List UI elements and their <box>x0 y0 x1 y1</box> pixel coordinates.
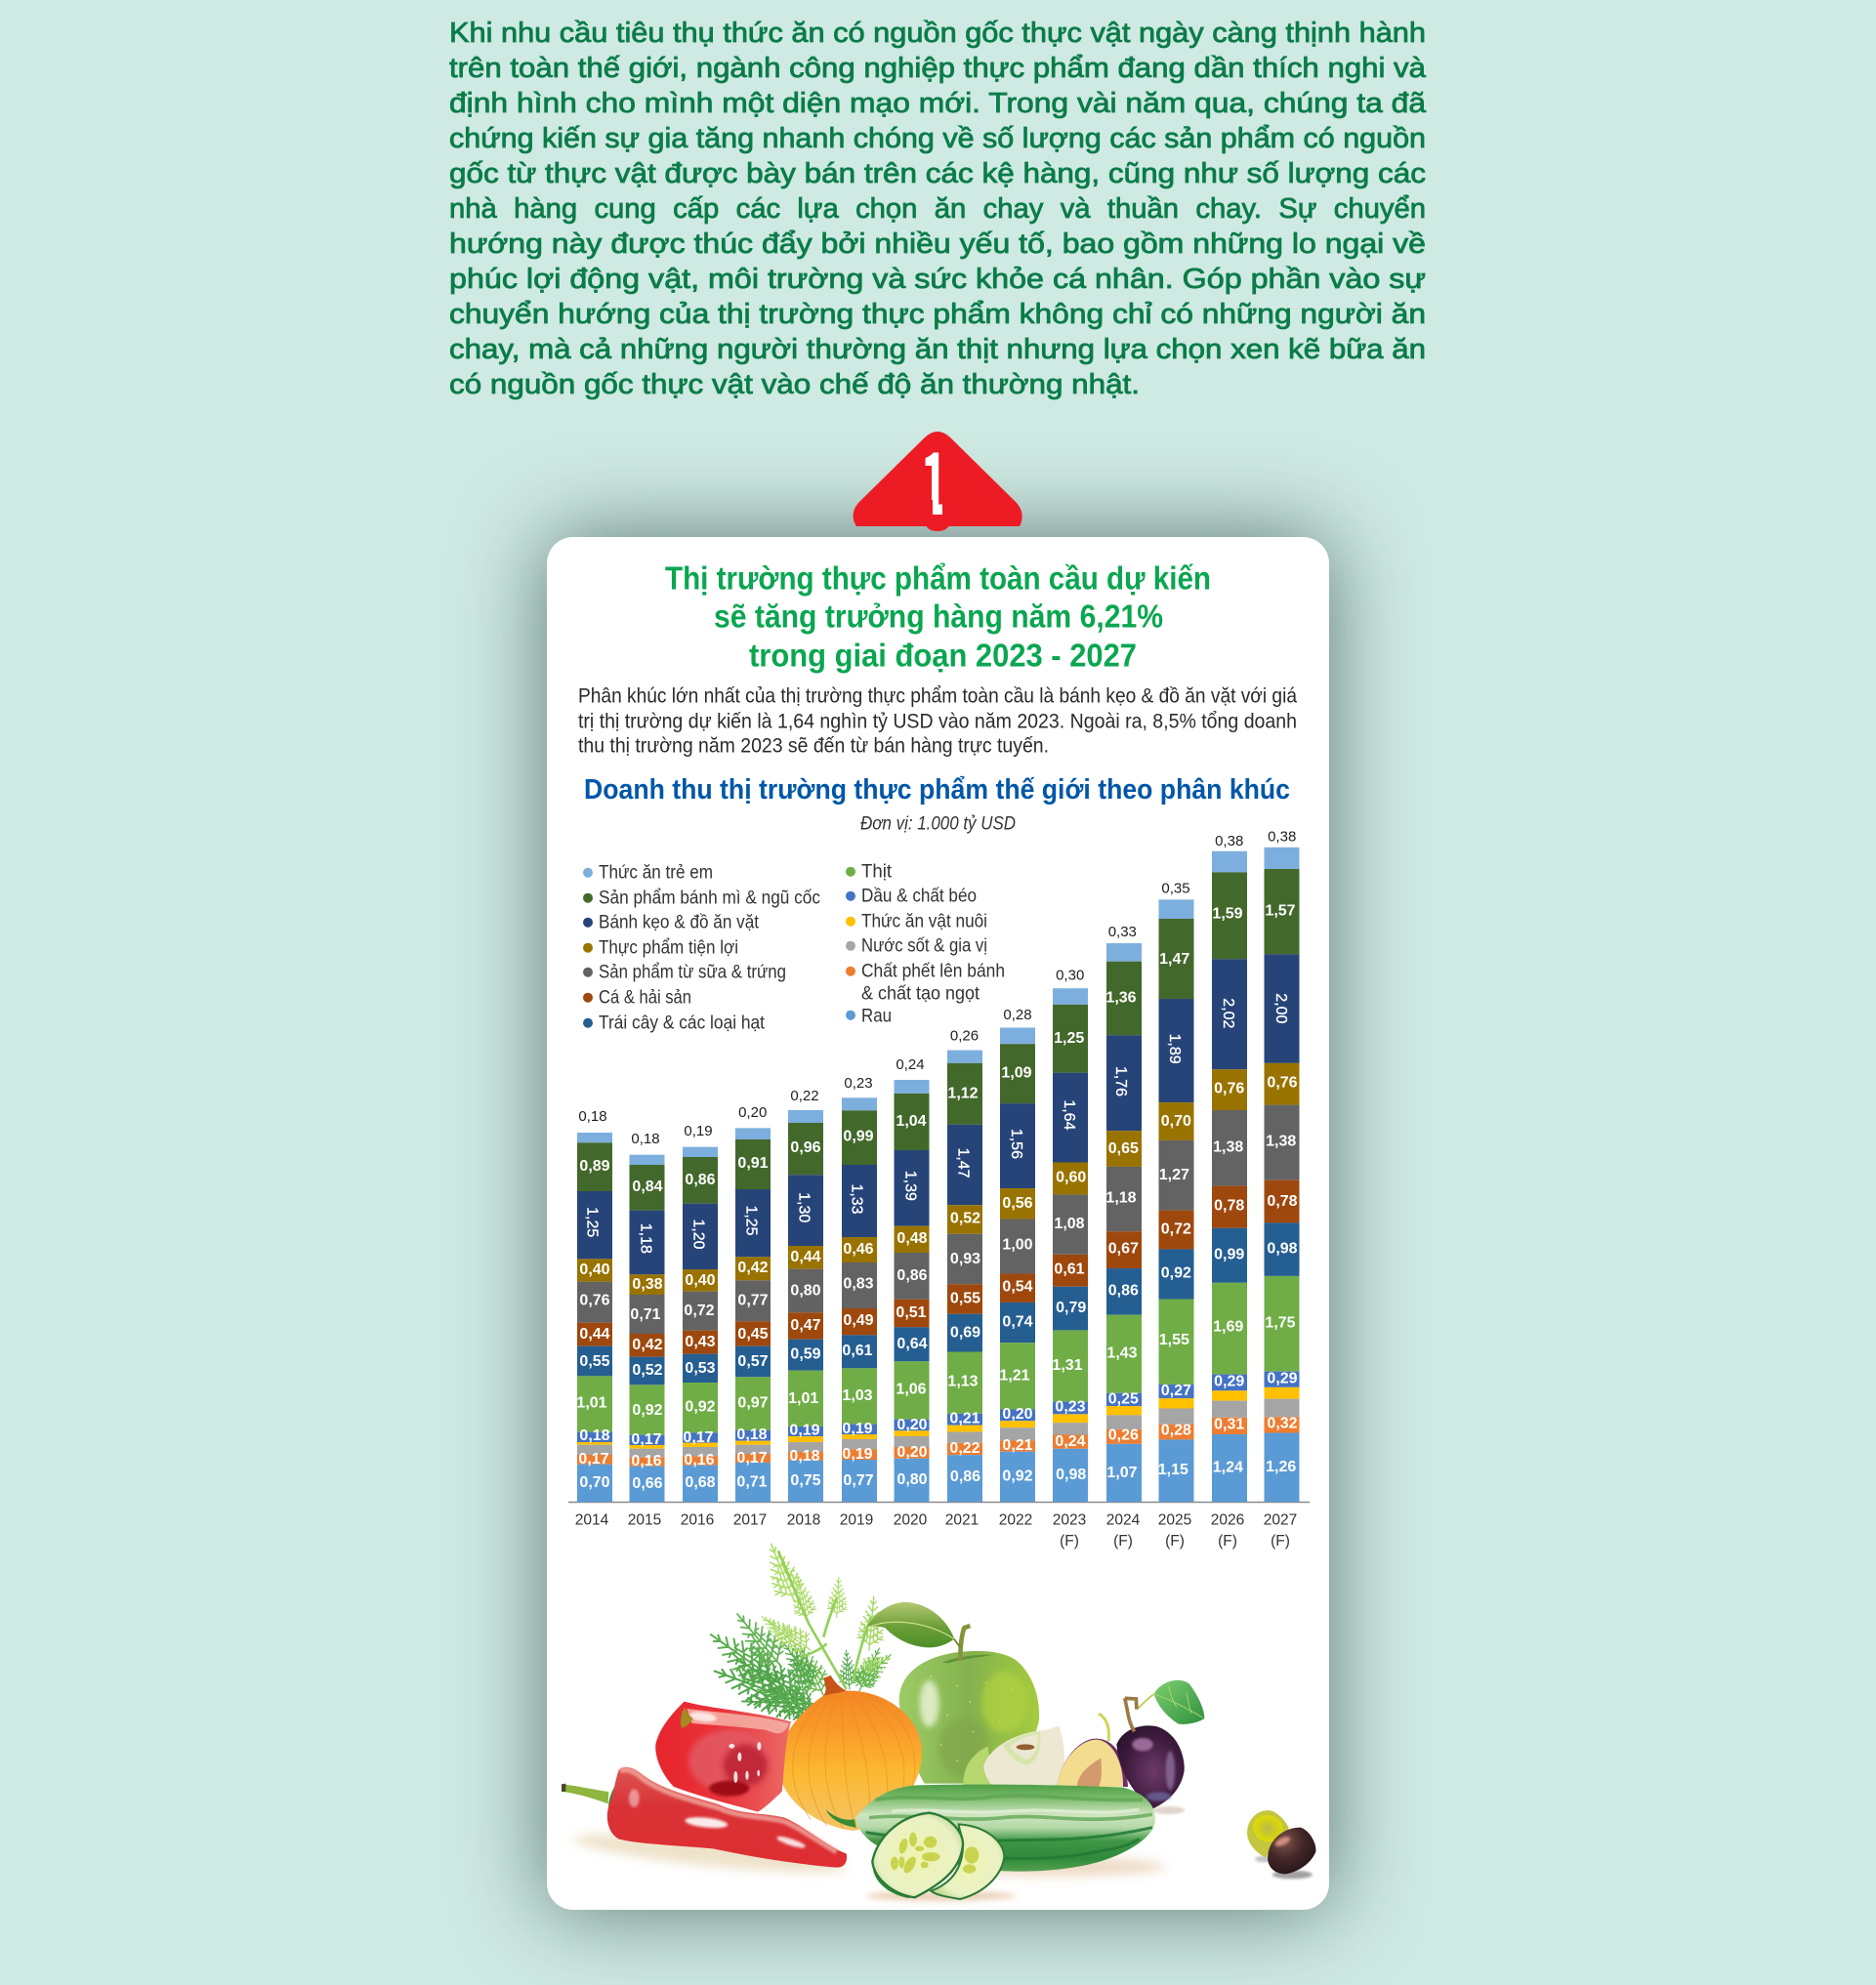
panel: white chart card <box>547 537 1329 1910</box>
legend: right column: Dầu & chất béo <box>861 886 977 907</box>
bar 2024 forecast: 0,65 <box>1108 1140 1139 1157</box>
year axis labels: (F) <box>1218 1533 1237 1550</box>
bar 2025 forecast: 1,27 <box>1159 1167 1189 1183</box>
bar 2016: 0,19 <box>684 1123 713 1139</box>
bar 2018: 0,59 <box>790 1345 821 1363</box>
bar 2026 forecast: 0,29 <box>1214 1373 1244 1390</box>
card heading: Thị trường thực phẩm toàn cầu dự kiến <box>665 560 1211 596</box>
intro paragraph <box>449 18 1426 400</box>
icon: red chili pepper <box>562 1767 847 1881</box>
year axis labels: 2020 <box>894 1511 928 1529</box>
bar 2018: 0,19 <box>789 1422 820 1439</box>
bar 2022: 0,92 <box>1002 1468 1033 1485</box>
bar 2022: 1,56 <box>1008 1129 1024 1159</box>
card heading: trong giai đoạn 2023 - 2027 <box>749 637 1137 674</box>
legend: left column: Sản phẩm bánh mì & ngũ cốc <box>599 888 820 909</box>
legend: left column: Thực phẩm tiện lợi <box>599 937 738 959</box>
bar 2014 <box>576 1108 612 1502</box>
card heading <box>665 560 1211 674</box>
bar 2018: 0,22 <box>790 1088 819 1104</box>
bar 2020: 0,24 <box>896 1056 925 1073</box>
bar 2023 forecast: 1,08 <box>1054 1216 1085 1232</box>
year axis labels: 2024 <box>1106 1511 1141 1529</box>
bar 2019: 1,33 <box>848 1183 865 1215</box>
bar 2022: 0,54 <box>1002 1279 1033 1296</box>
bar 2025 forecast: 0,28 <box>1161 1423 1191 1439</box>
icon: tomato <box>655 1702 791 1812</box>
card heading: sẽ tăng trưởng hàng năm 6,21% <box>714 598 1163 635</box>
icon: cucumber slices <box>872 1813 1004 1899</box>
bar 2022: 0,56 <box>1002 1195 1033 1212</box>
icon: plum with leaf <box>1116 1680 1204 1814</box>
bar 2021: 0,93 <box>950 1251 980 1267</box>
legend: left column: Bánh kẹo & đồ ăn vặt <box>599 912 760 933</box>
icon: apple leaf and stem <box>866 1602 970 1661</box>
bar 2026 forecast: 0,31 <box>1214 1417 1244 1433</box>
bar 2027 forecast: 0,76 <box>1267 1074 1298 1092</box>
bar 2014: 0,44 <box>579 1326 610 1343</box>
bar 2021: 0,52 <box>950 1211 980 1226</box>
bar 2014: 0,76 <box>579 1293 610 1308</box>
bar 2014: 1,01 <box>576 1394 607 1412</box>
icon: apple slice <box>963 1725 1064 1787</box>
bar 2017: 0,18 <box>736 1427 768 1443</box>
legend: left column <box>583 862 820 1034</box>
bar 2023 forecast: 0,60 <box>1056 1170 1086 1186</box>
intro paragraph: phúc lợi động vật, môi trường và sức khỏe cá nhân. Góp phần vào sự <box>449 264 1426 295</box>
bar 2015: 0,42 <box>632 1337 663 1353</box>
legend: right column: Thức ăn vật nuôi <box>861 911 987 932</box>
bar 2015: 0,52 <box>632 1362 663 1379</box>
year axis labels: 2017 <box>733 1511 767 1529</box>
bar 2015 <box>629 1131 664 1502</box>
bar 2016: 0,43 <box>685 1334 716 1350</box>
bar 2024 forecast: 1,36 <box>1105 990 1137 1007</box>
intro paragraph: nhà hàng cung cấp các lựa chọn ăn chay và thuần chay. Sự chuyển <box>449 193 1426 225</box>
bar 2017: 0,17 <box>736 1450 768 1467</box>
bar 2020: 0,20 <box>896 1444 928 1461</box>
bar 2014: 0,18 <box>579 1427 610 1444</box>
bar 2019: 0,19 <box>842 1421 873 1437</box>
bar 2021: 1,12 <box>947 1085 979 1101</box>
bar 2021: 1,47 <box>955 1147 971 1179</box>
bar 2027 forecast: 1,75 <box>1265 1314 1296 1332</box>
year axis labels: 2027 <box>1264 1511 1297 1529</box>
year axis labels: (F) <box>1165 1533 1185 1550</box>
legend: left column: Thức ăn trẻ em <box>599 862 713 884</box>
bar 2026 forecast: 0,76 <box>1214 1080 1244 1096</box>
bar 2018: 0,96 <box>790 1139 821 1156</box>
icon: plum half <box>1057 1714 1128 1787</box>
bar 2027 forecast: 0,29 <box>1267 1371 1298 1386</box>
bar 2015: 0,92 <box>632 1402 663 1419</box>
bar 2016: 0,40 <box>685 1272 716 1289</box>
icon: dill herb <box>700 1539 898 1726</box>
bar 2023 forecast: 0,24 <box>1055 1433 1086 1450</box>
bar 2014: 0,40 <box>579 1261 610 1278</box>
bar 2019: 0,99 <box>843 1129 874 1144</box>
bar 2024 forecast <box>1105 924 1142 1502</box>
bar 2025 forecast: 0,27 <box>1161 1383 1191 1399</box>
bar 2017: 0,91 <box>737 1155 769 1172</box>
bar 2025 forecast: 0,70 <box>1161 1113 1191 1130</box>
bar 2021: 0,86 <box>950 1468 980 1485</box>
bar 2015: 0,16 <box>631 1453 662 1469</box>
bar 2018: 0,44 <box>790 1249 821 1265</box>
bar 2019: 1,03 <box>842 1387 873 1404</box>
bar 2017: 1,25 <box>742 1205 760 1236</box>
bar 2023 forecast: 0,98 <box>1056 1467 1086 1483</box>
bar 2027 forecast: 1,38 <box>1266 1133 1296 1149</box>
bar 2017: 0,42 <box>737 1260 769 1276</box>
bar 2019: 0,61 <box>842 1343 873 1359</box>
bar 2027 forecast: 0,32 <box>1267 1416 1298 1432</box>
bar 2026 forecast: 1,59 <box>1212 906 1243 923</box>
bar 2018: 0,80 <box>790 1283 821 1299</box>
bar 2017: 0,20 <box>738 1104 767 1121</box>
intro paragraph: gốc từ thực vật được bày bán trên các kệ hàng, cũng như số lượng các <box>449 158 1426 189</box>
bar 2022: 0,28 <box>1003 1007 1032 1023</box>
bar 2015: 0,18 <box>631 1131 660 1147</box>
bar 2016: 0,92 <box>685 1398 716 1416</box>
bar 2024 forecast: 0,86 <box>1108 1283 1139 1300</box>
description text: Phân khúc lớn nhất của thị trường thực phẩm toàn cầu là bánh kẹo & đồ ăn vặt với giá <box>578 684 1297 708</box>
bar 2021: 0,26 <box>950 1027 979 1044</box>
legend: right column: Thịt <box>861 861 893 883</box>
bar 2021: 0,21 <box>949 1410 980 1427</box>
year axis labels: (F) <box>1271 1533 1290 1550</box>
chart unit: Đơn vị: 1.000 tỷ USD <box>860 814 1016 834</box>
bar 2015: 0,84 <box>632 1179 663 1195</box>
bar 2020: 0,64 <box>896 1336 928 1352</box>
intro paragraph: hướng này được thúc đẩy bởi nhiều yếu tố, bao gồm những lo ngại về <box>449 228 1426 260</box>
bar 2017: 0,77 <box>737 1293 769 1308</box>
legend: right column <box>846 861 1005 1027</box>
bar 2014: 0,17 <box>578 1451 609 1468</box>
bar 2019: 0,23 <box>844 1075 873 1092</box>
year axis labels: 2021 <box>945 1511 979 1529</box>
bar 2017 <box>735 1104 771 1502</box>
bar 2017: 0,57 <box>737 1353 769 1370</box>
bar 2019: 0,49 <box>843 1312 874 1329</box>
bar 2017: 0,45 <box>737 1326 769 1343</box>
bar 2018 <box>788 1088 823 1502</box>
bar 2027 forecast: 1,57 <box>1265 903 1296 920</box>
bar 2023 forecast: 1,64 <box>1061 1099 1077 1131</box>
illustration: fruit and vegetables <box>562 1539 1315 1901</box>
icon: onion <box>778 1675 922 1831</box>
bar 2026 forecast: 0,38 <box>1215 833 1243 849</box>
bar 2016: 0,86 <box>685 1172 716 1188</box>
legend: left column: Trái cây & các loại hạt <box>599 1013 766 1034</box>
bar 2027 forecast <box>1264 828 1299 1502</box>
bar 2022: 0,74 <box>1002 1314 1033 1330</box>
bar 2025 forecast: 0,35 <box>1161 881 1190 897</box>
bar 2023 forecast: 0,30 <box>1056 967 1084 984</box>
bar 2023 forecast: 1,31 <box>1052 1357 1083 1374</box>
bar 2020: 0,51 <box>896 1304 927 1321</box>
bar 2018: 0,18 <box>789 1448 820 1465</box>
bar 2026 forecast: 1,38 <box>1213 1138 1243 1155</box>
year axis labels: 2014 <box>575 1511 609 1529</box>
badge: red triangle with number 1 <box>854 417 1022 540</box>
bar 2025 forecast: 0,92 <box>1161 1265 1191 1281</box>
bar 2024 forecast: 1,18 <box>1105 1189 1137 1206</box>
icon: apple <box>899 1651 1039 1784</box>
legend: right column: Nước sốt & gia vị <box>861 935 987 957</box>
bar 2024 forecast: 1,07 <box>1106 1465 1138 1481</box>
bar 2026 forecast: 0,99 <box>1214 1246 1244 1262</box>
bar 2027 forecast: 1,26 <box>1266 1459 1296 1475</box>
bar 2020: 1,04 <box>896 1113 927 1130</box>
intro paragraph: định hình cho mình một diện mạo mới. Trong vài năm qua, chúng ta đã <box>449 88 1426 119</box>
bar 2021: 1,13 <box>947 1373 979 1390</box>
bar 2026 forecast: 0,78 <box>1214 1198 1244 1215</box>
year axis labels: 2016 <box>681 1511 714 1529</box>
chart axis <box>568 1502 1310 1504</box>
year axis labels: 2015 <box>628 1511 661 1529</box>
description text: thu thị trường năm 2023 sẽ đến từ bán hàng trực tuyến. <box>578 734 1049 758</box>
legend: left column: Sản phẩm từ sữa & trứng <box>599 962 786 983</box>
bar 2022: 1,00 <box>1002 1236 1033 1254</box>
bar 2014: 1,25 <box>584 1207 600 1237</box>
bar 2027 forecast: 2,00 <box>1272 993 1289 1023</box>
bar 2021: 0,55 <box>950 1291 980 1306</box>
bar 2015: 0,17 <box>631 1431 662 1448</box>
bar 2027 forecast: 0,98 <box>1267 1240 1298 1257</box>
bar 2016: 0,53 <box>685 1360 716 1377</box>
bar 2020: 1,06 <box>896 1381 927 1398</box>
bar 2025 forecast <box>1158 881 1193 1502</box>
bar 2015: 1,18 <box>637 1223 654 1254</box>
bar 2020: 0,86 <box>896 1267 928 1284</box>
bar 2016: 0,68 <box>685 1474 716 1491</box>
bar 2023 forecast: 0,79 <box>1056 1300 1086 1316</box>
bar 2025 forecast: 1,47 <box>1159 951 1189 968</box>
bar 2025 forecast: 1,15 <box>1158 1462 1188 1478</box>
bar 2018: 0,47 <box>790 1317 821 1334</box>
bar 2018: 1,30 <box>795 1192 813 1222</box>
bar 2023 forecast: 1,25 <box>1054 1030 1084 1047</box>
bar 2016: 0,16 <box>684 1452 715 1468</box>
bar 2024 forecast: 1,43 <box>1106 1345 1138 1361</box>
bar 2017: 0,97 <box>737 1394 769 1412</box>
bar 2020: 0,80 <box>896 1471 928 1488</box>
bar 2026 forecast: 1,24 <box>1213 1459 1243 1475</box>
bar 2021: 0,69 <box>950 1324 980 1341</box>
bar 2023 forecast: 0,23 <box>1055 1398 1086 1416</box>
bar 2014: 0,55 <box>579 1353 610 1370</box>
bar 2025 forecast: 0,72 <box>1161 1220 1191 1237</box>
intro paragraph: chứng kiến sự gia tăng nhanh chóng về số lượng các sản phẩm có nguồn <box>449 123 1426 154</box>
bar 2026 forecast: 1,69 <box>1213 1318 1243 1336</box>
intro paragraph: có nguồn gốc thực vật vào chế độ ăn thường nhật. <box>449 369 1140 400</box>
year axis labels <box>575 1511 1297 1550</box>
year axis labels: 2018 <box>787 1511 820 1529</box>
bar 2024 forecast: 0,67 <box>1108 1240 1139 1257</box>
bar 2024 forecast: 1,76 <box>1112 1066 1129 1096</box>
year axis labels: 2022 <box>999 1511 1032 1529</box>
bar 2015: 0,66 <box>632 1475 663 1492</box>
intro paragraph: chay, mà cả những người thường ăn thịt nhưng lựa chọn xen kẽ bữa ăn <box>449 334 1426 365</box>
legend: left column: Cá & hải sản <box>599 987 691 1009</box>
bar 2020 <box>895 1056 930 1502</box>
bar 2016 <box>683 1123 718 1502</box>
bar 2022: 0,20 <box>1002 1406 1033 1423</box>
bar 2014: 0,18 <box>578 1108 607 1125</box>
bar 2019 <box>842 1075 877 1502</box>
bar 2023 forecast <box>1052 967 1088 1502</box>
bar 2024 forecast: 0,25 <box>1108 1391 1139 1408</box>
year axis labels: 2023 <box>1053 1511 1086 1529</box>
legend: right column: Chất phết lên bánh <box>861 961 1005 982</box>
bar 2025 forecast: 1,89 <box>1166 1034 1183 1064</box>
bar 2014: 0,89 <box>579 1158 610 1175</box>
bar 2016: 0,17 <box>683 1429 714 1446</box>
bar 2015: 0,38 <box>632 1276 663 1293</box>
description text <box>578 684 1297 758</box>
year axis labels: (F) <box>1060 1533 1079 1550</box>
bar 2020: 0,20 <box>896 1417 928 1433</box>
bar 2019: 0,83 <box>843 1275 874 1293</box>
intro paragraph: chuyển hướng của thị trường thực phẩm không chỉ có những người ăn <box>449 299 1426 330</box>
bar 2014: 0,70 <box>579 1474 610 1491</box>
legend: right column: & chất tạo ngọt <box>861 983 980 1005</box>
bar 2018: 1,01 <box>788 1390 818 1407</box>
bar 2022: 1,09 <box>1001 1065 1032 1082</box>
icon: cucumber <box>855 1785 1165 1901</box>
year axis labels: 2019 <box>840 1511 873 1529</box>
bar 2016: 0,72 <box>684 1303 715 1319</box>
year axis labels: 2026 <box>1211 1511 1244 1529</box>
bar 2027 forecast: 0,78 <box>1267 1193 1298 1210</box>
bar 2018: 0,75 <box>790 1472 821 1489</box>
bar 2024 forecast: 0,33 <box>1108 924 1137 940</box>
bar 2022: 1,21 <box>999 1367 1030 1385</box>
bar 2019: 0,46 <box>843 1241 874 1258</box>
bar 2015: 0,71 <box>630 1306 661 1323</box>
description text: trị thị trường dự kiến là 1,64 nghìn tỷ USD vào năm 2023. Ngoài ra, 8,5% tổng doanh <box>578 710 1297 733</box>
bar 2022 <box>999 1007 1035 1502</box>
bar 2021 <box>947 1027 982 1502</box>
bar 2027 forecast: 0,38 <box>1268 828 1296 846</box>
bar 2019: 0,19 <box>842 1446 873 1463</box>
chart title: Doanh thu thị trường thực phẩm thế giới theo phân khúc <box>584 774 1290 806</box>
bar 2016: 1,20 <box>689 1219 707 1250</box>
bar 2025 forecast: 1,55 <box>1159 1332 1189 1348</box>
legend: right column: Rau <box>861 1006 892 1027</box>
bar 2019: 0,77 <box>843 1472 874 1489</box>
bar 2017: 0,71 <box>736 1474 768 1490</box>
badge: red triangle with number 1: 1 <box>920 417 948 540</box>
bar 2020: 0,48 <box>896 1230 928 1247</box>
year axis labels: (F) <box>1113 1533 1133 1550</box>
icon: cucumber stem <box>826 1809 856 1828</box>
bar 2023 forecast: 0,61 <box>1054 1261 1085 1277</box>
icon: olives <box>1247 1810 1315 1879</box>
intro paragraph: Khi nhu cầu tiêu thụ thức ăn có nguồn gốc thực vật ngày càng thịnh hành <box>449 18 1426 49</box>
year axis labels: 2025 <box>1158 1511 1191 1529</box>
bar 2024 forecast: 0,26 <box>1108 1427 1139 1443</box>
bar 2026 forecast: 2,02 <box>1220 998 1236 1028</box>
bar 2022: 0,21 <box>1002 1437 1033 1454</box>
intro paragraph: trên toàn thế giới, ngành công nghiệp thực phẩm đang dần thích nghi và <box>449 53 1426 84</box>
bar 2021: 0,22 <box>949 1440 980 1457</box>
bar 2020: 1,39 <box>902 1171 918 1201</box>
bar 2026 forecast <box>1212 833 1247 1502</box>
